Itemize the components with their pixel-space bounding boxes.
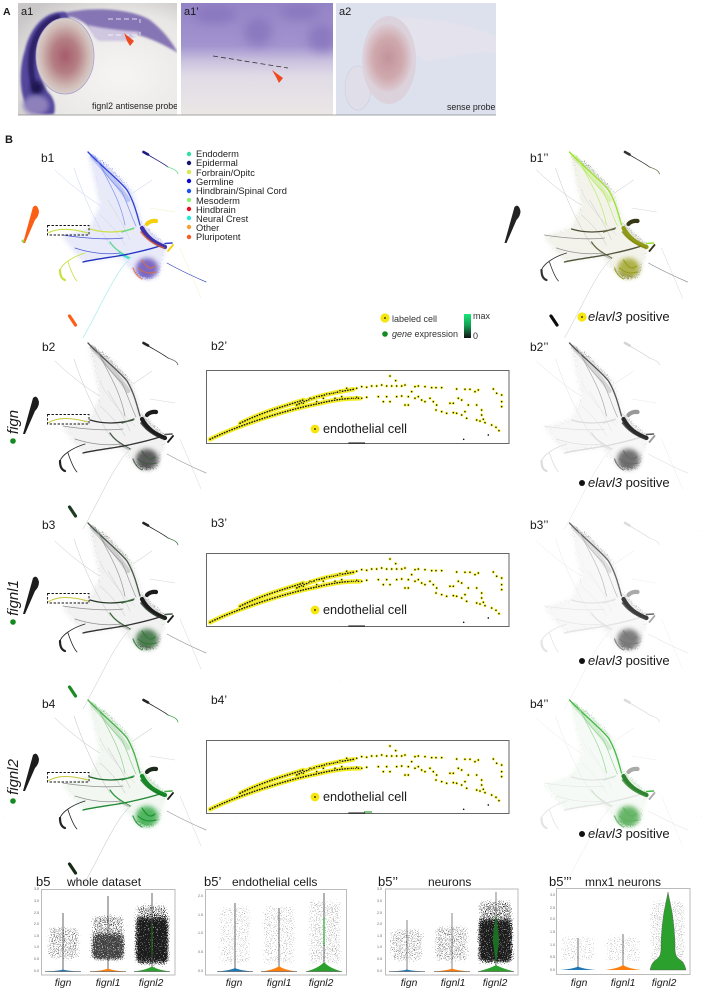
panel: b4' endothelial zoom bbox=[206, 693, 509, 814]
violin chart: b5 whole dataset: 1.5 bbox=[34, 934, 39, 938]
legend: cell types: Hindbrain/Spinal Cord bbox=[196, 186, 287, 196]
violin chart: b5''' mnx1 neurons: fignl1 bbox=[611, 978, 635, 989]
violin chart: b5 whole dataset: 0.5 bbox=[34, 957, 39, 961]
panel: b1'' elavl3 UMAP bbox=[504, 151, 688, 338]
legend: cell types: Pluripotent bbox=[196, 232, 241, 242]
dashed line a1' bbox=[213, 56, 288, 68]
panel: a1 antisense embryo photo bbox=[18, 3, 178, 115]
violin chart: b5'' neurons: 1.0 bbox=[377, 945, 382, 949]
violin chart: b5' endothelial cells: 2.0 bbox=[198, 894, 203, 898]
violin chart: b5''' mnx1 neurons: 3.0 bbox=[550, 893, 555, 897]
violin chart: b5''' mnx1 neurons: fignl2 bbox=[652, 978, 677, 989]
legend: labeled cell and gene expression: max bbox=[473, 311, 491, 321]
panel: b3' endothelial zoom: endothelial cell bbox=[323, 603, 407, 617]
violin chart: b5 whole dataset bbox=[34, 874, 175, 989]
violin chart: b5'' neurons: 1.5 bbox=[377, 934, 382, 938]
selection box b3 bbox=[48, 594, 89, 603]
violin chart: b5 whole dataset: b5 bbox=[36, 874, 50, 889]
panel: b4' endothelial zoom: b4’ bbox=[211, 693, 227, 707]
violin chart: b5'' neurons: 3.0 bbox=[377, 899, 382, 903]
violin chart: b5' endothelial cells: 1.0 bbox=[198, 931, 203, 935]
b4 label: b4 bbox=[42, 697, 56, 711]
b3'' label: b3’’ bbox=[530, 518, 548, 532]
arrowhead on a1 bbox=[124, 33, 134, 46]
b3 label: b3 bbox=[42, 518, 56, 532]
violin chart: b5''' mnx1 neurons: fign bbox=[571, 978, 588, 989]
violin chart: b5'' neurons: fign bbox=[401, 978, 418, 989]
violin chart: b5''' mnx1 neurons: 1.5 bbox=[550, 930, 555, 934]
legend: cell types: Neural Crest bbox=[196, 214, 249, 224]
a2 caption: sense probe bbox=[447, 102, 496, 112]
violin chart: b5 whole dataset: 2.0 bbox=[34, 922, 39, 926]
legend: cell types bbox=[187, 149, 287, 242]
legend: cell types: Hindbrain bbox=[196, 205, 236, 215]
violin chart: b5'' neurons: 0.5 bbox=[377, 957, 382, 961]
violin chart: b5'' neurons: neurons bbox=[428, 875, 471, 889]
a1 caption: fignl2 antisense probe bbox=[92, 101, 178, 111]
violin chart: b5''' mnx1 neurons: 0.0 bbox=[550, 968, 555, 972]
panel: b2' endothelial zoom bbox=[206, 339, 509, 444]
selection box b1 bbox=[48, 226, 89, 235]
legend: cell types: Germline bbox=[196, 177, 234, 187]
panel: b3' endothelial zoom bbox=[206, 516, 509, 626]
a1 label: a1 bbox=[21, 6, 33, 18]
gene label fign: fign bbox=[5, 410, 22, 434]
violin chart: b5'' neurons: 2.5 bbox=[377, 911, 382, 915]
a2 label: a2 bbox=[339, 6, 351, 18]
violin chart: b5 whole dataset: whole dataset bbox=[66, 875, 142, 889]
violin chart: b5' endothelial cells: 0.5 bbox=[198, 950, 203, 954]
panel: b4'' elavl3 UMAP bbox=[504, 697, 688, 886]
violin chart: b5' endothelial cells: fignl2 bbox=[309, 978, 334, 989]
violin chart: b5'' neurons: 3.5 bbox=[377, 887, 382, 891]
violin chart: b5'' neurons: 0.0 bbox=[377, 969, 382, 973]
gene label fignl1: fignl1 bbox=[5, 580, 22, 616]
panel: b3'' elavl3 UMAP bbox=[504, 518, 688, 709]
panel: b2' endothelial zoom: b2’ bbox=[211, 339, 227, 353]
violin chart: b5'' neurons: fignl1 bbox=[441, 978, 465, 989]
dashed box on tail bbox=[108, 19, 140, 35]
selection box b4 bbox=[48, 772, 89, 782]
legend: labeled cell and gene expression bbox=[380, 311, 491, 341]
legend: cell types: Epidermal bbox=[196, 158, 238, 168]
violin chart: b5''' mnx1 neurons: 1.0 bbox=[550, 943, 555, 947]
violin chart: b5'' neurons: b5’’ bbox=[378, 874, 398, 889]
violin chart: b5''' mnx1 neurons: 2.0 bbox=[550, 917, 555, 921]
violin chart: b5''' mnx1 neurons: 0.5 bbox=[550, 955, 555, 959]
a1' label: a1’ bbox=[184, 6, 199, 18]
panel label A: A bbox=[3, 6, 11, 18]
panel: a2 sense embryo photo bbox=[336, 3, 496, 115]
panel: b2' endothelial zoom: endothelial cell bbox=[323, 422, 407, 436]
violin chart: b5''' mnx1 neurons: b5’’’ bbox=[549, 874, 572, 889]
violin chart: b5' endothelial cells: endothelial cells bbox=[232, 875, 317, 889]
elavl3 positive b1'': elavl3 positive bbox=[588, 309, 670, 324]
elavl3 positive b4'': elavl3 positive bbox=[588, 826, 670, 841]
violin chart: b5' endothelial cells: 1.5 bbox=[198, 913, 203, 917]
gene label fignl2: fignl2 bbox=[5, 758, 22, 795]
b1 label: b1 bbox=[41, 151, 55, 165]
elavl3 positive b2'': elavl3 positive bbox=[588, 475, 670, 490]
panel label B: B bbox=[5, 134, 13, 146]
panel: b1 coloured UMAP bbox=[23, 151, 206, 338]
panel: a1' magnified trunk photo bbox=[181, 3, 336, 115]
b4'' label: b4’’ bbox=[530, 697, 548, 711]
selection box b2 bbox=[48, 414, 89, 424]
panel: b3 fignl1 UMAP bbox=[5, 518, 206, 709]
violin chart: b5 whole dataset: 2.5 bbox=[34, 911, 39, 915]
legend: cell types: Endoderm bbox=[196, 149, 239, 159]
violin chart: b5 whole dataset: 0.0 bbox=[34, 969, 39, 973]
violin chart: b5''' mnx1 neurons: mnx1 neurons bbox=[585, 875, 661, 889]
violin chart: b5'' neurons: 2.0 bbox=[377, 922, 382, 926]
arrowhead on a1' bbox=[272, 70, 283, 83]
violin chart: b5' endothelial cells: b5’ bbox=[204, 874, 221, 889]
violin chart: b5'' neurons bbox=[377, 874, 518, 989]
legend: cell types: Other bbox=[196, 223, 219, 233]
b2 label: b2 bbox=[42, 340, 56, 354]
panel: b2 fign UMAP bbox=[5, 340, 206, 529]
violin chart: b5 whole dataset: 3.0 bbox=[34, 899, 39, 903]
violin chart: b5 whole dataset: fign bbox=[55, 978, 72, 989]
panel: b4' endothelial zoom: endothelial cell bbox=[323, 790, 407, 804]
violin chart: b5''' mnx1 neurons: 2.5 bbox=[550, 906, 555, 910]
violin chart: b5' endothelial cells: fignl1 bbox=[267, 978, 291, 989]
panel: b4 fignl2 UMAP bbox=[5, 697, 206, 886]
violin chart: b5 whole dataset: fignl2 bbox=[139, 978, 164, 989]
violin chart: b5'' neurons: fignl2 bbox=[483, 978, 508, 989]
violin chart: b5 whole dataset: 1.0 bbox=[34, 945, 39, 949]
legend: cell types: Mesoderm bbox=[196, 196, 240, 206]
violin chart: b5''' mnx1 neurons bbox=[549, 874, 690, 989]
violin chart: b5' endothelial cells: 0.0 bbox=[198, 969, 203, 973]
legend: cell types: Forbrain/Opitc bbox=[196, 168, 255, 178]
legend: labeled cell and gene expression: gene expression bbox=[392, 329, 458, 339]
b1'' label: b1’’ bbox=[530, 151, 548, 165]
elavl3 positive b3'': elavl3 positive bbox=[588, 653, 670, 668]
panel: b2'' elavl3 UMAP bbox=[504, 340, 688, 529]
panel: b3' endothelial zoom: b3’ bbox=[211, 516, 227, 530]
legend: labeled cell and gene expression: labeled cell bbox=[392, 314, 437, 324]
legend: labeled cell and gene expression: 0 bbox=[473, 331, 478, 341]
violin chart: b5 whole dataset: 3.5 bbox=[34, 887, 39, 891]
violin chart: b5' endothelial cells: fign bbox=[226, 978, 243, 989]
violin chart: b5 whole dataset: fignl1 bbox=[96, 978, 120, 989]
b2'' label: b2’’ bbox=[530, 340, 548, 354]
violin chart: b5' endothelial cells bbox=[198, 874, 346, 989]
